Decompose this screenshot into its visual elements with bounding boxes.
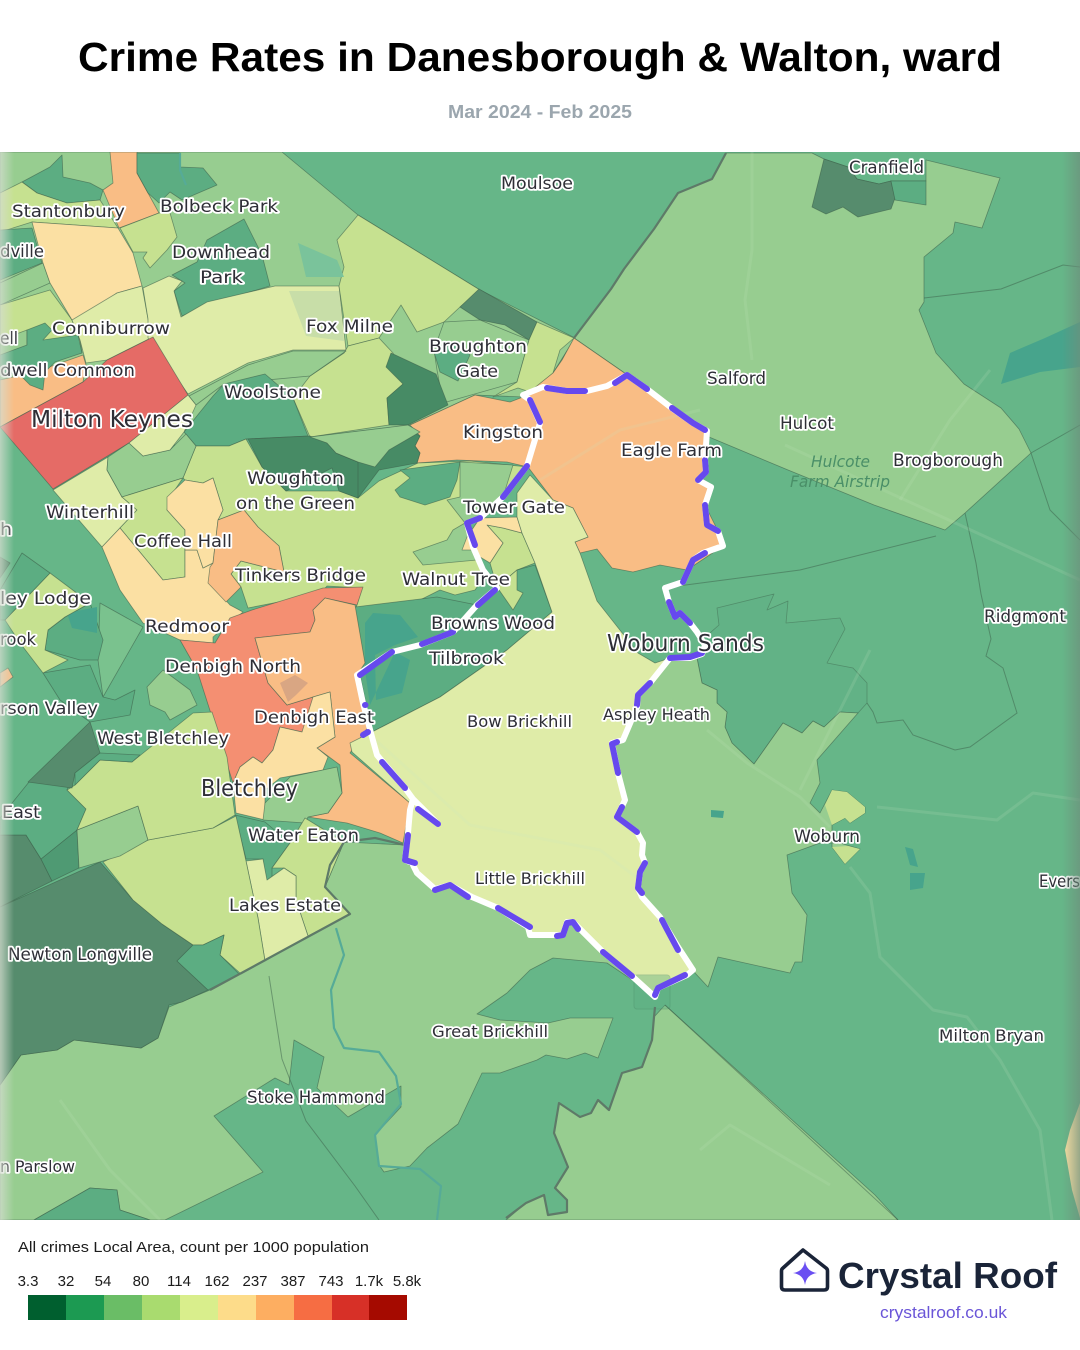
region: Winterhill pale bbox=[53, 457, 137, 547]
region: north pale bbox=[337, 215, 480, 346]
region: Woburn light bbox=[612, 658, 865, 987]
place labels: Tilbrook bbox=[428, 649, 504, 669]
lake east bbox=[1001, 322, 1080, 384]
small marker square bbox=[634, 975, 670, 1009]
roads bbox=[60, 152, 1080, 1220]
place labels: Brogborough bbox=[893, 451, 1003, 471]
legend scale values: 1.7k bbox=[355, 1273, 384, 1290]
website link text: crystalroof.co.uk bbox=[880, 1303, 1008, 1322]
subtitle: date range: Mar 2024 - Feb 2025 bbox=[448, 102, 632, 122]
map edge vignette bbox=[0, 152, 1080, 1220]
region: Denbigh North red-orange bbox=[180, 587, 363, 783]
legend scale values: 32 bbox=[58, 1273, 74, 1290]
region: Tower Gate patches bbox=[395, 462, 460, 505]
place labels: Stantonbury bbox=[12, 202, 125, 222]
region: Denbigh East cream bbox=[233, 692, 335, 820]
place labels: West Bletchley bbox=[97, 729, 229, 749]
ward boundary: white outline bbox=[357, 375, 723, 997]
legend scale values: 3.3 bbox=[18, 1273, 38, 1290]
legend colour swatches bbox=[28, 1295, 407, 1320]
region: ward pale interior bbox=[350, 475, 693, 997]
region: Fox Milne pale bbox=[143, 276, 346, 394]
legend scale values: 80 bbox=[133, 1273, 149, 1290]
region: east of ward edge patches bbox=[487, 525, 535, 576]
region: dark Woolstone east bbox=[386, 353, 448, 425]
place labels: rson Valley bbox=[0, 699, 98, 719]
thick outer boundary lines bbox=[210, 153, 726, 1218]
place labels: Moulsoe bbox=[501, 174, 573, 194]
place labels: on the Green bbox=[236, 494, 355, 514]
legend scale values: 162 bbox=[204, 1273, 230, 1290]
legend scale values: 387 bbox=[280, 1273, 306, 1290]
logo wordmark: Crystal Roof bbox=[838, 1255, 1058, 1296]
region: Milton Keynes north block bbox=[0, 152, 575, 446]
place labels: Conniburrow bbox=[52, 319, 170, 339]
place labels: Hulcot bbox=[780, 414, 834, 434]
region: bottom-right cream sliver bbox=[1065, 1103, 1080, 1218]
thin boundaries, roads and rivers bbox=[60, 152, 1080, 1220]
legend scale values: 237 bbox=[242, 1273, 268, 1290]
region: Conniburrow pale bbox=[72, 286, 153, 363]
region: West Bletchley bbox=[67, 712, 235, 840]
region: Dwell Common bbox=[0, 355, 86, 427]
place labels: Downhead bbox=[172, 243, 270, 263]
place labels: Bow Brickhill bbox=[467, 712, 572, 731]
legend scale values: 114 bbox=[167, 1273, 191, 1290]
region: dark north corner bbox=[460, 289, 537, 340]
place labels: Woburn Sands bbox=[607, 631, 764, 657]
region: Bolbeck dark bbox=[137, 153, 217, 203]
place labels: Tower Gate bbox=[462, 498, 565, 518]
place labels: Ridgmont bbox=[984, 607, 1066, 627]
region: Broughton bbox=[434, 320, 529, 403]
region: south MK pale bbox=[183, 439, 528, 608]
place labels: Redmoor bbox=[145, 617, 229, 637]
logo: Crystal Roof bbox=[782, 1250, 1058, 1322]
place labels: Milton Bryan bbox=[939, 1026, 1044, 1045]
region: Milton Keynes red bbox=[0, 337, 188, 489]
region: top-left patches bbox=[22, 155, 103, 203]
region: orange north bbox=[103, 152, 159, 228]
place labels: ley Lodge bbox=[0, 589, 91, 609]
ponds bbox=[711, 810, 925, 890]
place labels: Water Eaton bbox=[248, 826, 359, 846]
place labels: Walnut Tree bbox=[402, 570, 510, 590]
place labels: Kingston bbox=[463, 423, 543, 443]
place labels: Bletchley bbox=[201, 776, 298, 802]
region: Coffee Hall and Redmoor cream bbox=[102, 528, 243, 643]
place labels bbox=[0, 158, 1080, 1176]
place labels: Aspley Heath bbox=[603, 705, 710, 724]
place labels: Bolbeck Park bbox=[160, 197, 278, 217]
legend scale values: 54 bbox=[95, 1273, 111, 1290]
region: Tinkers Bridge orange bbox=[208, 510, 284, 602]
region: pale south of Fox Milne bbox=[293, 338, 403, 437]
place labels: Coffee Hall bbox=[134, 532, 232, 552]
place labels: Eagle Farm bbox=[621, 441, 722, 461]
place labels: h bbox=[0, 520, 12, 540]
legend scale values bbox=[18, 1273, 422, 1290]
place labels: East bbox=[2, 803, 40, 823]
region: Cranfield dark bbox=[812, 159, 895, 217]
place labels: Hulcote bbox=[811, 452, 870, 471]
place labels: Browns Wood bbox=[431, 614, 555, 634]
title: Crime Rates in Danesborough & Walton, ward bbox=[78, 34, 1002, 80]
place labels: Denbigh North bbox=[165, 657, 301, 677]
place labels: n Parslow bbox=[0, 1157, 75, 1176]
place labels: Tinkers Bridge bbox=[234, 566, 366, 586]
legend scale values: 5.8k bbox=[393, 1273, 422, 1290]
legend title: All crimes Local Area, count per 1000 population bbox=[18, 1239, 369, 1256]
region: Denbigh East orange bbox=[255, 598, 410, 843]
place labels: Newton Longville bbox=[8, 945, 152, 965]
place labels: Great Brickhill bbox=[432, 1022, 548, 1041]
region: Great Brickhill and Stoke Hammond light bbox=[0, 842, 640, 1220]
region: Stantonbury cream bbox=[32, 222, 142, 320]
place labels: Denbigh East bbox=[254, 708, 374, 728]
ward boundary: purple dashes bbox=[360, 375, 718, 995]
region: west MK patches bbox=[98, 603, 143, 697]
region: Lakes Estate bbox=[246, 859, 308, 961]
thin dark lines bbox=[269, 265, 1080, 1220]
place labels: Woolstone bbox=[224, 383, 321, 403]
place labels: dville bbox=[0, 242, 44, 262]
place labels: rook bbox=[0, 630, 36, 650]
place labels: Fox Milne bbox=[306, 317, 393, 337]
place labels: Stoke Hammond bbox=[247, 1088, 385, 1108]
place labels: ell bbox=[0, 329, 18, 349]
choropleth regions bbox=[0, 152, 1080, 1220]
icon: house with star bbox=[782, 1250, 828, 1290]
region: Kingston and Eagle Farm bbox=[410, 338, 723, 572]
place labels: Little Brickhill bbox=[475, 869, 585, 888]
place labels: Gate bbox=[456, 362, 498, 382]
region: Browns Wood and Tilbrook green bbox=[355, 565, 552, 732]
place labels: dwell Common bbox=[0, 361, 135, 381]
region: west of Lakes Estate bbox=[103, 816, 265, 974]
map panel bbox=[0, 152, 1080, 1220]
region: Woburn Sands block bbox=[697, 594, 867, 764]
region: south-east light wedge bbox=[506, 1005, 898, 1220]
region: Woughton dark bbox=[248, 436, 359, 498]
rivers bbox=[180, 153, 441, 1220]
place labels: Milton Keynes bbox=[31, 407, 193, 433]
place labels: Cranfield bbox=[849, 158, 924, 178]
place labels: Salford bbox=[707, 369, 766, 389]
region: Water Eaton bbox=[235, 815, 290, 881]
region: East green bbox=[0, 778, 86, 859]
place labels: Winterhill bbox=[46, 503, 134, 523]
legend bbox=[18, 1239, 422, 1320]
legend scale values: 743 bbox=[318, 1273, 344, 1290]
place labels: Farm Airstrip bbox=[790, 472, 890, 491]
place labels: Park bbox=[200, 268, 243, 288]
region: Downhead patches bbox=[120, 213, 177, 268]
place labels: Broughton bbox=[429, 337, 527, 357]
region: Newton Longville dark bbox=[0, 862, 208, 1085]
region: Woolstone mid green bbox=[184, 374, 308, 446]
place labels: Woburn bbox=[794, 827, 860, 847]
place labels: Lakes Estate bbox=[229, 896, 341, 916]
region: Salford and Hulcot rural bbox=[574, 153, 1031, 530]
place labels: Woughton bbox=[247, 469, 344, 489]
